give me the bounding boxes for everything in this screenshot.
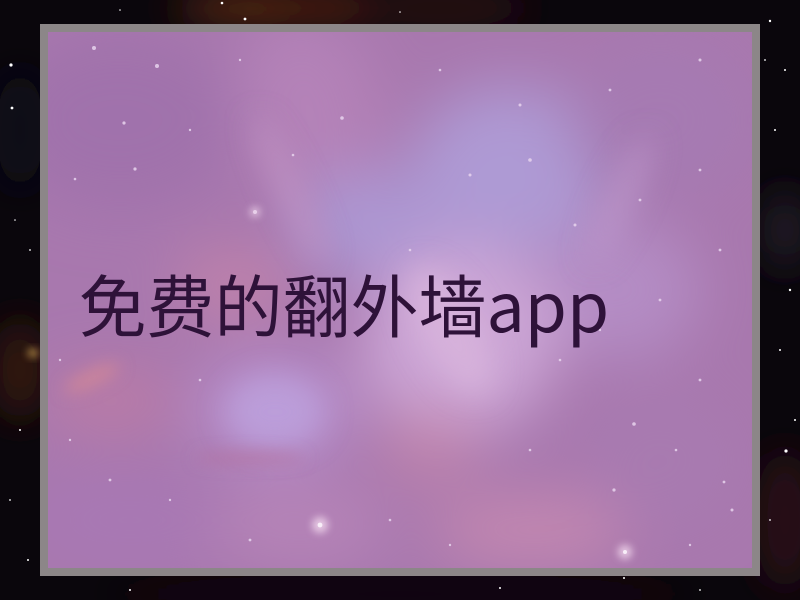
nebula panel <box>48 32 752 568</box>
title: 免费的翻外墙app <box>78 253 609 352</box>
